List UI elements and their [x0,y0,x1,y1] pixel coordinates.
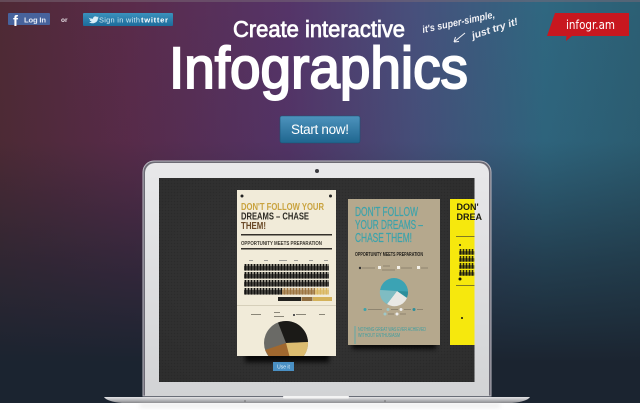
laptop shadow [140,404,500,407]
poster 2 heading: CHASE THEM! [355,231,412,245]
handwritten note: it's super-simple, [421,10,496,36]
button: small log in on screen [273,362,294,371]
poster 2 pie legend [364,308,423,316]
title: Infographics: Infographics [169,36,468,101]
text: or: or [61,17,68,24]
laptop screen [159,178,483,382]
handwritten note: just try it! [469,16,520,43]
button: Start now [280,116,360,143]
poster 1 pictogram legend [278,297,332,301]
poster 1 heading: DREAMS – CHASE [241,210,309,222]
poster 3: yellow: DREA [456,212,483,222]
poster 2 legend [359,266,428,270]
poster 1 fold [237,304,336,307]
logo: infogr.am red flag: infogr.am [566,17,615,32]
poster 1 subheading: OPPORTUNITY MEETS PREPARATION [241,241,322,247]
poster 3: yellow: DON' [456,202,479,212]
poster 2 heading [355,205,423,245]
poster 1 pie chart [264,321,308,356]
laptop [104,161,530,403]
poster 2 footer quote: WITHOUT ENTHUSIASM [358,333,400,339]
laptop lid [143,161,491,396]
poster 1 heading [241,201,324,232]
button: Start now: Start now! [291,122,349,137]
icon: twitter bird [88,16,99,23]
handwritten note [421,10,520,43]
poster 2 heading: YOUR DREAMS – [355,218,423,232]
icon: small arrow [454,33,465,42]
icon: camera [315,169,319,173]
button: Facebook log in: Log In [24,16,46,24]
poster 2: kraft paper [348,199,440,349]
button: Sign in with Twitter: twitter [141,16,168,24]
poster 2 heading: DON'T FOLLOW [355,205,418,219]
title: Create interactive: Create interactive [233,16,405,42]
poster 1 heading: THEM! [241,220,266,232]
button: small log in on screen: Use it [277,364,291,370]
button: Facebook log in [8,13,50,30]
button: Sign in with Twitter [83,13,173,26]
poster 1: cream infographic [237,190,336,365]
button: Facebook log in: f [13,13,19,30]
poster 3: yellow [450,199,483,345]
poster 1 pie legend [251,312,325,317]
poster 2 footer quote: NOTHING GREAT WAS EVER ACHIEVED [358,327,426,333]
laptop base [104,396,530,403]
button: Sign in with Twitter: Sign in with [99,16,140,24]
logo: infogr.am red flag [547,13,629,41]
poster 1 heading: DON'T FOLLOW YOUR [241,201,324,213]
poster 1 subheading [241,234,332,250]
poster 1 pictogram chart [244,260,329,296]
poster 2 subheading: OPPORTUNITY MEETS PREPARATION [355,252,423,258]
poster 2 footer quote [354,326,426,344]
poster 2 pie chart [380,278,408,306]
